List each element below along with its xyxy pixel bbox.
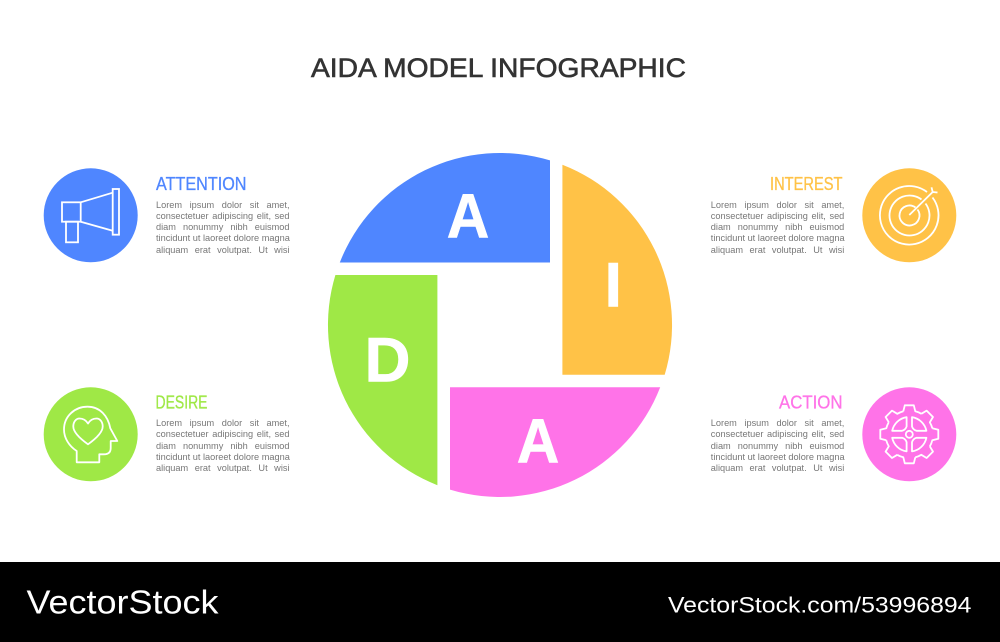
segment: attention (blue): A [447, 182, 489, 252]
text block: desire: tincidunt ut laoreet dolore magna [156, 452, 290, 462]
text block: attention: Lorem ipsum dolor sit amet, [156, 200, 290, 210]
text block: interest: consectetuer adipiscing elit, sed [711, 211, 844, 221]
text block: action: aliquam erat volutpat. Ut wisi [711, 463, 844, 473]
heading: action: ACTION [779, 393, 842, 413]
text block: action: consectetuer adipiscing elit, sed [711, 429, 844, 439]
heading: attention: ATTENTION [156, 174, 246, 194]
text block: interest: diam nonummy nibh euismod [711, 222, 844, 232]
text block: attention [156, 200, 290, 255]
segment: desire (green) [328, 275, 437, 485]
central AIDA circle diagram [328, 153, 672, 497]
text block: attention: consectetuer adipiscing elit, sed [156, 211, 290, 221]
icon: head with heart on green circle [44, 387, 138, 481]
text block: desire: consectetuer adipiscing elit, sed [156, 429, 290, 439]
footer bar [0, 562, 1000, 642]
heading: interest: INTEREST [770, 174, 842, 194]
text block: attention: diam nonummy nibh euismod [156, 222, 290, 232]
heading: desire: DESIRE [156, 393, 208, 413]
text block: desire: diam nonummy nibh euismod [156, 441, 290, 451]
text block: action: Lorem ipsum dolor sit amet, [711, 418, 844, 428]
text block: action: tincidunt ut laoreet dolore magna [711, 452, 845, 462]
title: AIDA MODEL INFOGRAPHIC [311, 53, 686, 83]
segment: interest (orange) [562, 165, 672, 375]
icon: megaphone on blue circle [44, 168, 138, 262]
text block: desire [156, 418, 290, 473]
segment: action (pink) [450, 387, 660, 497]
text block: action [710, 418, 845, 473]
text block: action: diam nonummy nibh euismod [711, 441, 844, 451]
segment: attention (blue) [340, 153, 550, 262]
text block: attention: tincidunt ut laoreet dolore magna [156, 233, 290, 243]
icon: target on orange circle [862, 168, 956, 262]
icon: gear on pink circle [862, 387, 956, 481]
text block: desire: Lorem ipsum dolor sit amet, [156, 418, 290, 428]
text block: desire: aliquam erat volutpat. Ut wisi [156, 463, 290, 473]
text block: interest: tincidunt ut laoreet dolore magna [711, 233, 845, 243]
footer image id text: VectorStock.com/53996894 [668, 592, 972, 617]
segment: action (pink): A [517, 407, 559, 477]
text block: interest: aliquam erat volutpat. Ut wisi [711, 244, 844, 254]
text block: interest [710, 200, 845, 255]
segment: desire (green): D [364, 326, 410, 396]
text block: interest: Lorem ipsum dolor sit amet, [711, 200, 844, 210]
footer logo text: VectorStock [26, 584, 219, 621]
segment: interest (orange): I [604, 251, 622, 321]
text block: attention: aliquam erat volutpat. Ut wisi [156, 244, 290, 254]
